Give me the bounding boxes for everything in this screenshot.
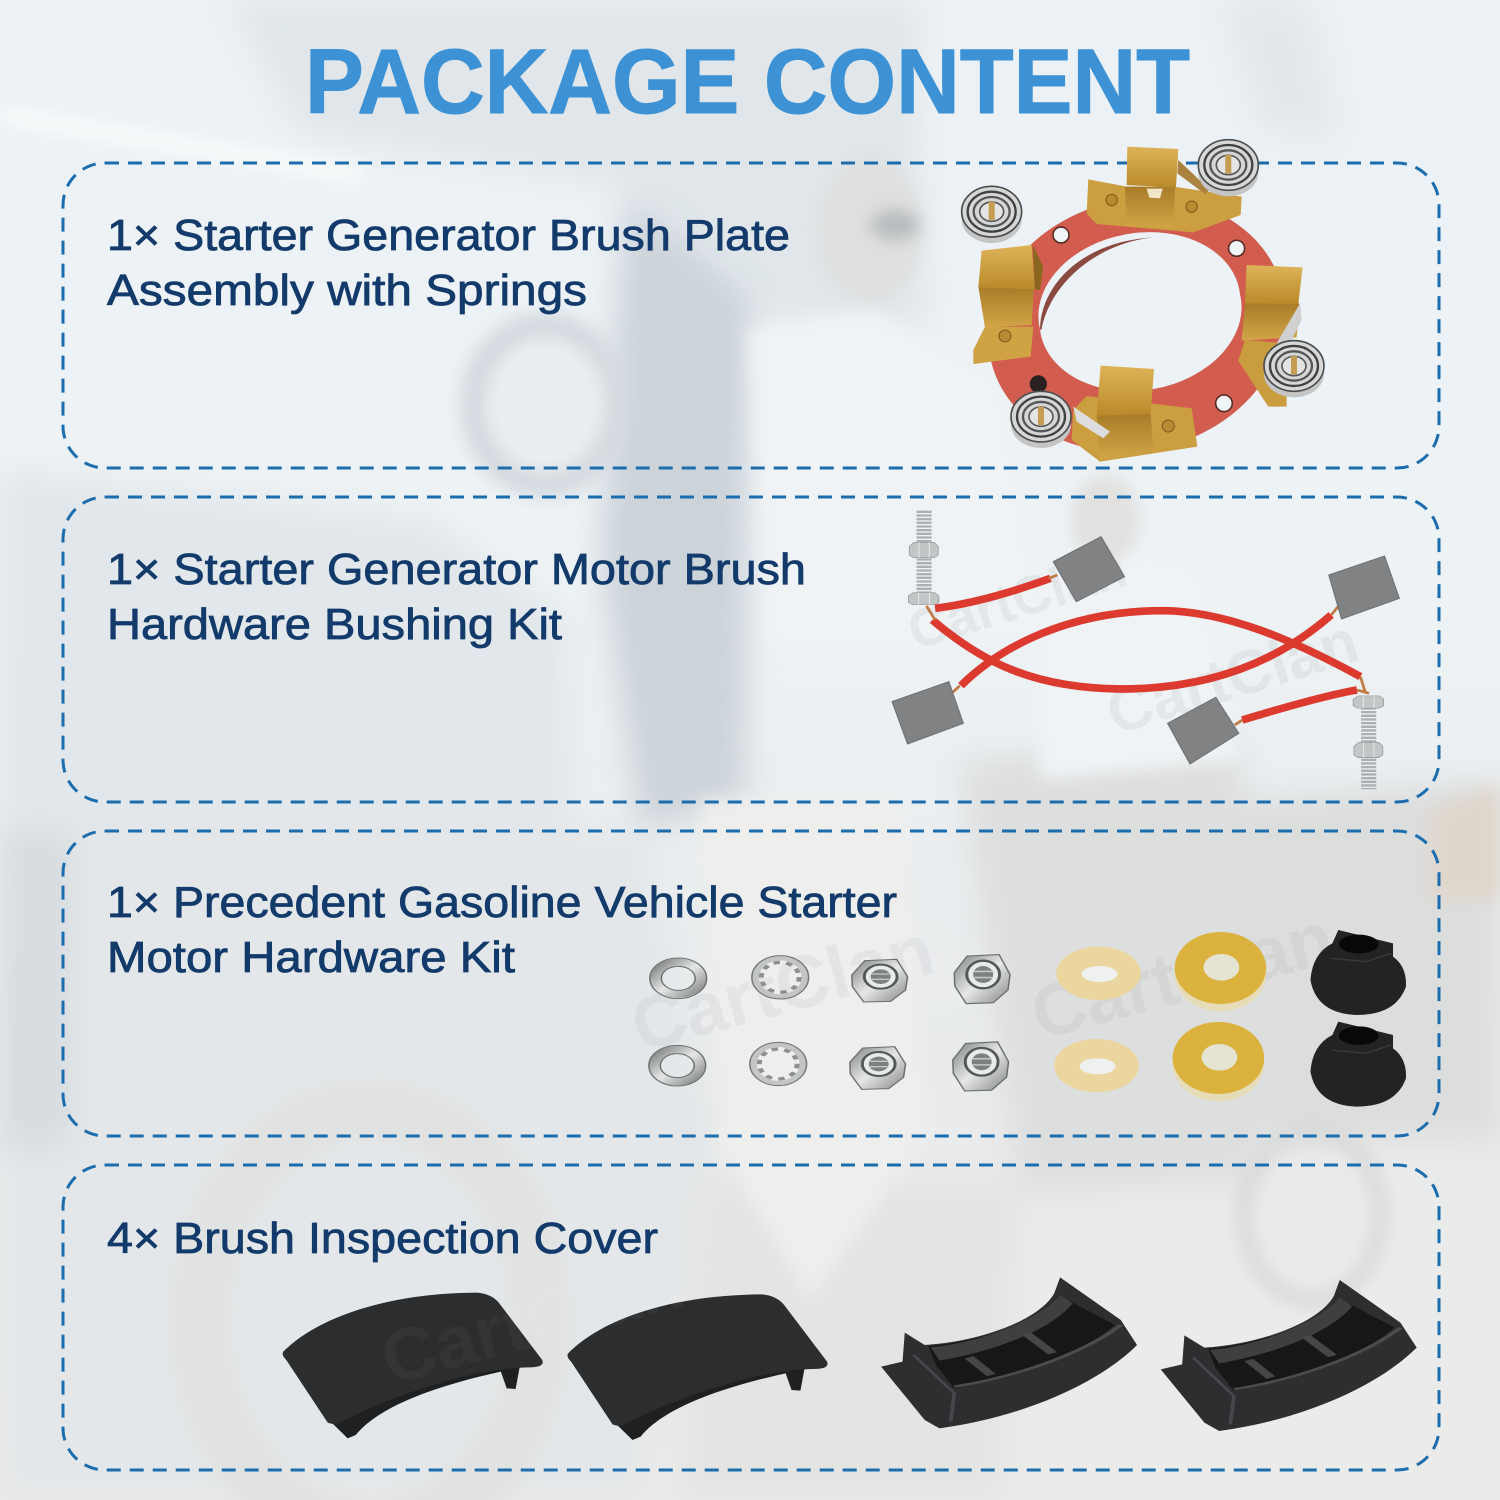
left bolt: [909, 511, 939, 605]
label: hardware kit: Motor Hardware Kit: [107, 933, 515, 982]
panel: inspection covers: [63, 1165, 1439, 1470]
wires: [926, 575, 1369, 725]
watermark: CartClan: [1099, 607, 1366, 748]
top bracket: [1087, 147, 1242, 232]
cover underside: [1161, 1280, 1417, 1431]
product photo: brushes with red wires: [892, 511, 1399, 789]
left bracket: [973, 245, 1043, 364]
product photo: four covers: [283, 1277, 1417, 1440]
black bushings: [1310, 930, 1406, 1107]
label: hardware kit: 1× Precedent Gasoline Vehicle Starter: [107, 878, 897, 927]
label: brush plate assembly: 1× Starter Generator Brush Plate: [107, 211, 790, 260]
right bolt: [1353, 696, 1384, 789]
springs: [962, 140, 1324, 448]
product photo: washers, nuts, bushings: [649, 930, 1406, 1107]
label: brush plate assembly: [107, 211, 790, 315]
product photo: brush plate with springs: [962, 140, 1324, 462]
bottom bracket: [1072, 366, 1197, 462]
title: PACKAGE CONTENT: [305, 31, 1190, 133]
carbon brushes: [892, 537, 1399, 764]
fibre washers: [1054, 932, 1266, 1101]
panel: brush plate assembly: [63, 140, 1439, 468]
cover underside: [881, 1277, 1137, 1428]
label: motor brush hardware: [107, 545, 806, 649]
label: hardware kit: [107, 878, 897, 982]
label: brush plate assembly: Assembly with Springs: [107, 266, 587, 315]
right bracket: [1238, 265, 1303, 407]
cover top view: [283, 1293, 543, 1438]
watermark: CartClan: [901, 538, 1134, 661]
cover top view: [567, 1294, 828, 1440]
label: inspection covers: 4× Brush Inspection Cover: [107, 1214, 658, 1263]
watermark: CartClan: [623, 907, 942, 1067]
watermark: CartClan: [373, 1240, 692, 1400]
label: motor brush hardware: 1× Starter Generator Motor Brush: [107, 545, 806, 594]
label: motor brush hardware: Hardware Bushing Kit: [107, 600, 562, 649]
watermark: CartClan: [1023, 895, 1342, 1055]
steel hardware: [649, 955, 1010, 1091]
panel: hardware kit: [63, 831, 1439, 1136]
panel: motor brush hardware: [63, 497, 1439, 802]
